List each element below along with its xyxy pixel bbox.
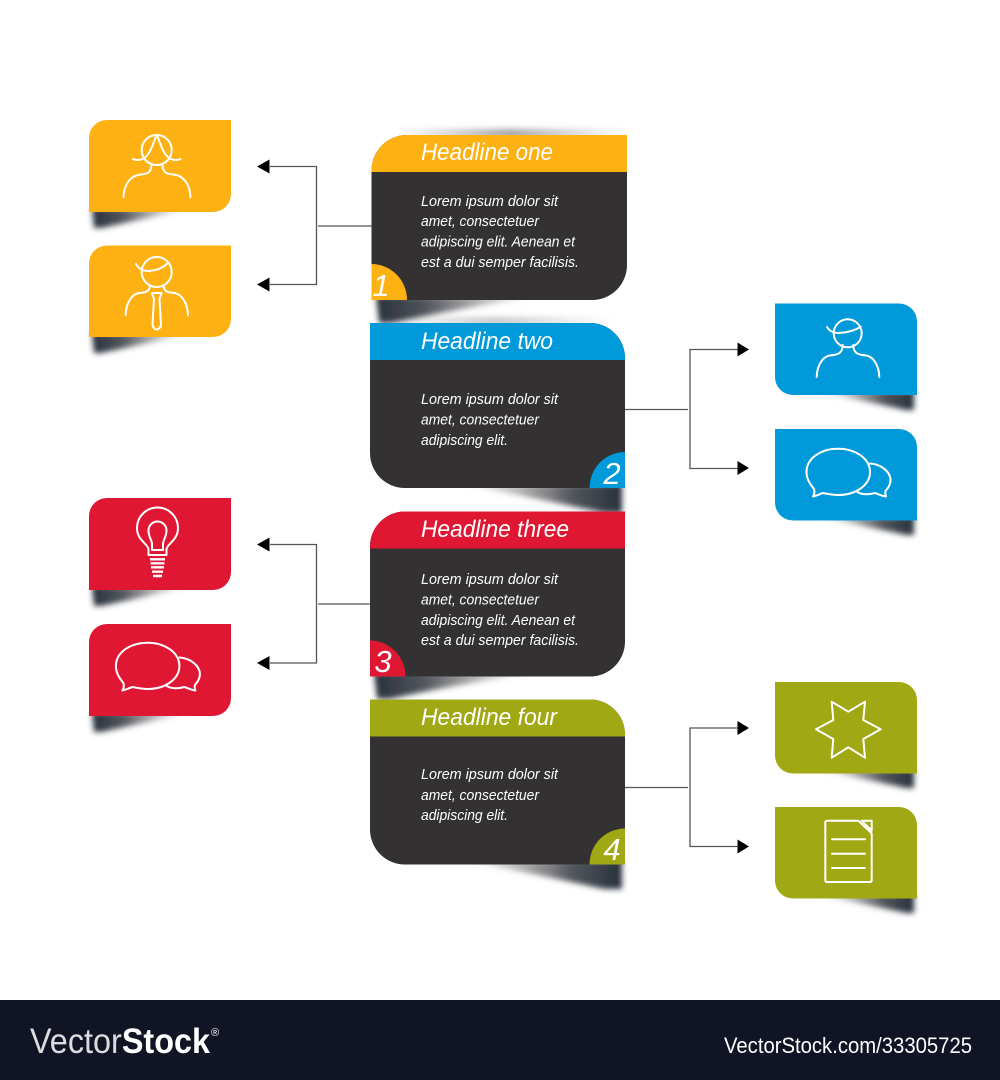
shadows under the small cards and headline cards bbox=[92, 129, 914, 913]
footer image id: VectorStock.com/33305725 bbox=[724, 1033, 972, 1058]
arrow connector: headline two to blue cards bbox=[625, 342, 749, 475]
panel: headline three bbox=[370, 512, 625, 679]
icon: man with tie bbox=[126, 257, 188, 330]
panel: blue card, chat icon bbox=[775, 429, 917, 520]
arrow connector: headline one to orange cards bbox=[257, 160, 372, 292]
panel: olive card, document icon bbox=[775, 807, 917, 898]
panel: red card, chat icon bbox=[89, 624, 231, 716]
number badge 1: 1 bbox=[372, 268, 390, 303]
arrow connector: headline three to red cards bbox=[257, 538, 370, 670]
text block: headline one body: amet, consectetuer bbox=[421, 213, 540, 230]
number badge 4: 4 bbox=[603, 832, 621, 867]
arrow connector: headline four to olive cards bbox=[625, 721, 749, 854]
heading: headline one: Headline one bbox=[421, 139, 553, 166]
footer bar bbox=[0, 1000, 1000, 1080]
text block: headline four body: Lorem ipsum dolor sit bbox=[421, 766, 559, 783]
panel: orange card, woman icon bbox=[89, 120, 231, 212]
heading: headline four: Headline four bbox=[421, 704, 558, 731]
panel: blue card, person icon bbox=[775, 304, 917, 395]
number badge 1 bbox=[372, 264, 407, 303]
number badge 2: 2 bbox=[602, 456, 621, 491]
panel: olive card, star icon bbox=[775, 682, 917, 774]
text block: headline four body: adipiscing elit. bbox=[421, 807, 508, 824]
text block: headline four body: amet, consectetuer bbox=[421, 787, 540, 804]
text block: headline three body bbox=[421, 571, 579, 649]
icon: document bbox=[825, 821, 872, 882]
icon: light bulb bbox=[137, 508, 178, 576]
text block: headline two body bbox=[421, 391, 559, 449]
registered mark: ® bbox=[211, 1027, 219, 1039]
number badge 2 bbox=[590, 452, 625, 491]
text block: headline three body: Lorem ipsum dolor sit bbox=[421, 571, 559, 588]
text block: headline one body bbox=[421, 193, 579, 271]
icon: woman bbox=[124, 135, 190, 197]
text block: headline three body: amet, consectetuer bbox=[421, 592, 540, 608]
icon: chat bubbles bbox=[116, 643, 200, 690]
text block: headline one body: Lorem ipsum dolor sit bbox=[421, 193, 559, 210]
text block: headline two body: amet, consectetuer bbox=[421, 412, 540, 428]
panel: red card, light bulb icon bbox=[89, 498, 231, 590]
panel: headline one bbox=[372, 135, 627, 303]
text block: headline two body: adipiscing elit. bbox=[421, 432, 508, 449]
number badge 3 bbox=[370, 640, 406, 679]
icon: person bbox=[817, 319, 879, 377]
text block: headline one body: adipiscing elit. Aenean et bbox=[421, 234, 576, 250]
icon: six-pointed star bbox=[816, 702, 881, 758]
number badge 3: 3 bbox=[374, 644, 392, 679]
text block: headline two body: Lorem ipsum dolor sit bbox=[421, 391, 559, 408]
text block: headline four body bbox=[421, 766, 559, 824]
icon: chat bubbles bbox=[806, 449, 890, 496]
footer logo: VectorStock bbox=[30, 1022, 210, 1061]
panel: orange card, man with tie icon bbox=[89, 246, 231, 337]
text block: headline one body: est a dui semper facilisis. bbox=[421, 254, 579, 271]
panel: headline four bbox=[370, 700, 625, 867]
panel: headline two bbox=[370, 323, 625, 491]
number badge 4 bbox=[590, 828, 625, 867]
text block: headline three body: adipiscing elit. Aenean et bbox=[421, 612, 576, 629]
heading: headline three: Headline three bbox=[421, 516, 569, 543]
text block: headline three body: est a dui semper facilisis. bbox=[421, 632, 579, 649]
heading: headline two: Headline two bbox=[421, 328, 553, 355]
